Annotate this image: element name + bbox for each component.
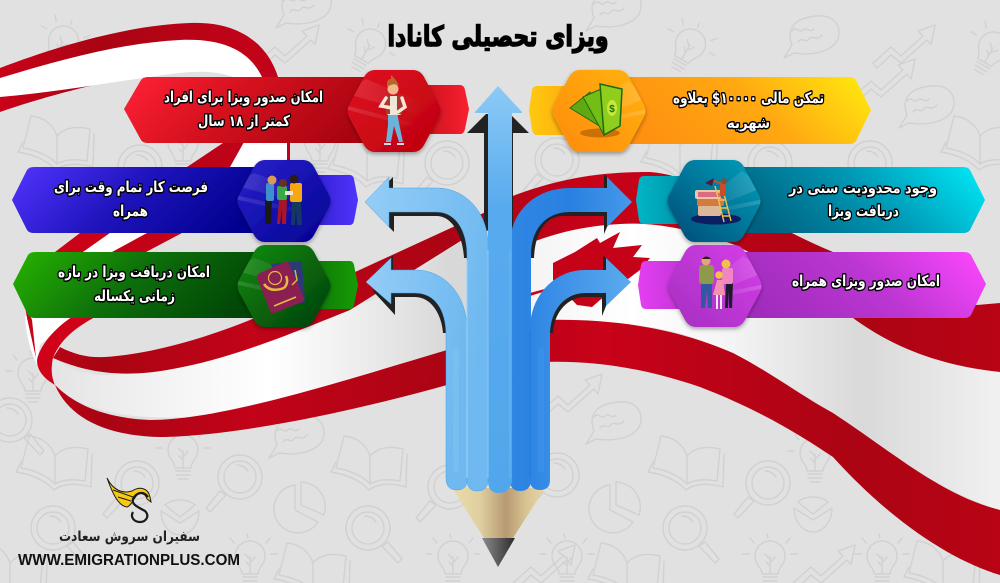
panel: companion visa (purple) [638, 245, 986, 327]
hexagon icon: money: $ [609, 104, 615, 115]
text: وجود محدودیت سنی در [788, 179, 937, 197]
pencil with arrows [365, 86, 632, 567]
text: فرصت کار تمام وقت برای [54, 178, 208, 196]
pencil highlights [456, 250, 541, 478]
arrow: upper left [365, 177, 488, 491]
hexagon icon: three people [234, 160, 330, 242]
ribbon: upper red band left [53, 210, 490, 374]
pencil tip [452, 488, 545, 567]
ribbon: red band upper right [510, 172, 1000, 372]
panel: full-time work for companion (blue) [12, 160, 358, 242]
ribbon: lower red band left [55, 350, 447, 437]
hexagon icon: passports [234, 245, 330, 327]
ribbon: red band lower right [540, 320, 1000, 575]
text: تمکن مالی ۱۰۰۰۰$ بعلاوه [673, 89, 824, 107]
arrow shadows [372, 114, 607, 333]
panel: financial ability (orange): شهریه [727, 114, 770, 132]
logo [18, 478, 240, 569]
hexagon icon: young person [344, 70, 440, 152]
logo: wing and swan mark [107, 478, 151, 522]
maple leaf [553, 232, 650, 307]
panel: visa for under 18 (red) [124, 70, 469, 152]
logo: company name: سفیران سروش سعادت [59, 529, 200, 545]
arrow: lower left [366, 258, 467, 490]
title: ویزای تحصیلی کانادا [388, 20, 608, 53]
panel: visa for under 18 (red): کمتر از ۱۸ سال [198, 112, 290, 130]
hexagon icon: money [552, 70, 649, 152]
ribbon: top-left band [0, 23, 290, 167]
panel: financial ability (orange) [529, 70, 871, 152]
text: امکان صدور ویزا برای افراد [164, 88, 323, 106]
ribbon: middle diagonal strips [55, 233, 110, 252]
website url: WWW.EMIGRATIONPLUS.COM [18, 552, 240, 569]
panel: age limit (teal): دریافت ویزا [828, 202, 899, 220]
text: امکان دریافت ویزا در بازه [58, 263, 210, 281]
hexagon icon: family [668, 245, 765, 327]
panel: full-time work for companion (blue): همراه [113, 202, 148, 220]
ribbon: white body right [512, 215, 1000, 510]
ribbon: left loop [25, 316, 72, 365]
panel: single-year visa window (green): زمانی یکساله [94, 287, 175, 305]
text: امکان صدور ویزای همراه [792, 272, 940, 290]
arrow: center [475, 86, 522, 493]
ribbon: white body left [52, 237, 467, 418]
panel: age limit (teal) [636, 160, 985, 242]
arrow: lower right [530, 258, 631, 490]
panel: single-year visa window (green) [13, 245, 358, 327]
hexagon icon: books and ladder [668, 160, 764, 242]
arrow: upper right [510, 177, 632, 491]
